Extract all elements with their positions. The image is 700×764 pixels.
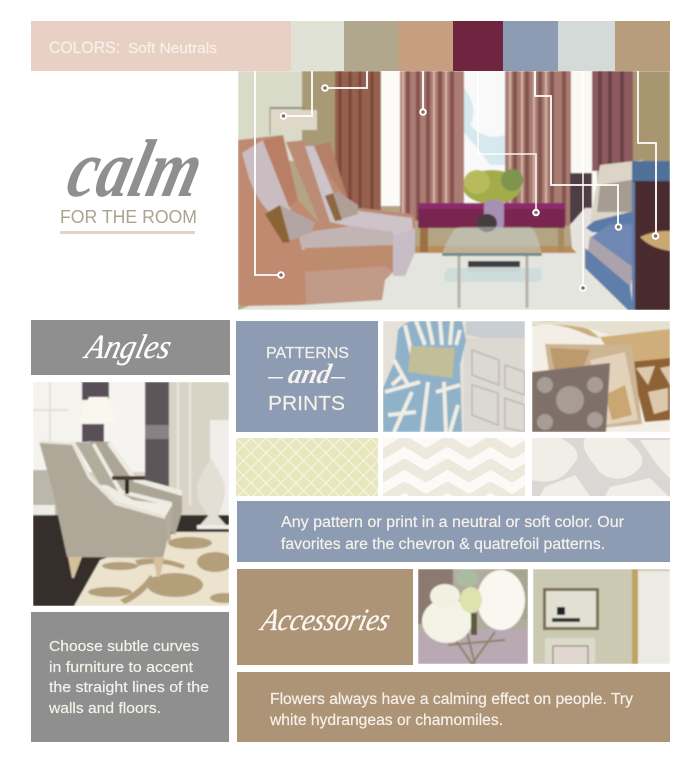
description text: walls and floors. — [48, 700, 161, 717]
floor and rug — [414, 246, 576, 254]
curtains — [335, 71, 381, 213]
front chair seat — [98, 485, 172, 517]
description text: Flowers always have a calming effect on people. Try — [270, 691, 633, 708]
description text: favorites are the chevron & quatrefoil patterns. — [281, 536, 605, 553]
windows — [380, 71, 401, 207]
lamp — [300, 109, 318, 131]
swatch: sage — [291, 21, 344, 71]
sofa — [570, 173, 592, 223]
panel: angles description — [31, 612, 229, 742]
side table — [640, 231, 670, 251]
rear chair — [286, 140, 416, 228]
panel: patterns description — [237, 501, 670, 562]
swatch: pale grey — [558, 21, 615, 71]
callout line: bench — [477, 130, 540, 216]
panel: angles heading — [31, 320, 230, 375]
rug — [74, 532, 229, 606]
photo: patterned throw pillows — [532, 320, 670, 432]
script heading: Angles — [80, 328, 175, 366]
heading: colors soft neutrals: COLORS: — [49, 39, 120, 57]
description text: the straight lines of the — [49, 679, 209, 696]
seat cushion front — [304, 244, 394, 251]
description text: in furniture to accent — [49, 659, 194, 676]
callout line: wall — [322, 71, 367, 91]
second chair — [75, 442, 172, 542]
upper frame — [543, 588, 599, 630]
flowers — [463, 170, 521, 204]
seat top — [298, 226, 393, 250]
swatch: khaki — [344, 21, 398, 71]
third chair back — [314, 142, 348, 198]
living room scene — [238, 71, 670, 310]
panel: accessories heading — [237, 569, 413, 665]
title: calm for the room — [59, 124, 212, 234]
middle pillow — [545, 344, 642, 430]
script heading: Accessories — [257, 602, 394, 637]
script word and with dashes: and — [286, 359, 335, 390]
photo: taupe armchairs on rug — [33, 382, 238, 606]
swatch: quatrefoil pattern — [236, 438, 378, 496]
swatch: chevron pattern — [383, 438, 525, 496]
callout line: lamp — [281, 71, 312, 119]
back pillows — [600, 329, 670, 366]
bench — [420, 228, 428, 252]
photo: framed art on wall — [533, 569, 670, 668]
lower frame — [545, 638, 595, 668]
subtitle underline — [60, 231, 195, 234]
photo: zebra print chair — [383, 321, 525, 432]
third chair — [88, 441, 182, 535]
panel: accessories description — [237, 672, 670, 742]
swatch: burgundy — [453, 21, 503, 71]
script word and with dashes — [268, 359, 345, 390]
callout line: side table — [638, 71, 658, 239]
front chair — [39, 441, 167, 558]
callout line: rug — [580, 71, 586, 291]
heading word prints: PRINTS — [268, 393, 345, 415]
swatch: slate blue — [503, 21, 558, 71]
front chair wing — [263, 135, 298, 207]
swatch: title panel — [31, 21, 291, 71]
urn — [197, 458, 226, 525]
front chair body — [238, 135, 393, 306]
description text: Choose subtle curves — [49, 638, 199, 655]
subtitle: FOR THE ROOM — [60, 207, 197, 227]
swatch: terracotta — [398, 21, 453, 71]
heading word patterns: PATTERNS — [266, 345, 349, 362]
heading: colors soft neutrals: Soft Neutrals — [128, 41, 217, 57]
lamp — [87, 396, 110, 401]
floor — [33, 515, 229, 606]
glass table — [442, 227, 542, 255]
chair — [383, 321, 466, 432]
lower base — [305, 266, 393, 304]
panel: patterns and prints heading — [236, 321, 378, 432]
description text: white hydrangeas or chamomiles. — [269, 712, 503, 729]
swatch: damask pattern — [532, 438, 670, 496]
pillow — [408, 346, 455, 378]
callout line: chair — [255, 71, 284, 278]
photo: white hydrangeas — [418, 569, 528, 664]
side table — [112, 476, 145, 480]
front pillow — [532, 363, 610, 432]
swatch: tan — [615, 21, 670, 71]
throw pillows — [280, 205, 316, 242]
script word calm: calm — [59, 124, 212, 215]
callout line: sofa — [535, 71, 621, 230]
colour palette bar — [31, 21, 670, 71]
front chair inner back — [242, 140, 292, 212]
description text: Any pattern or print in a neutral or soft color. Our — [281, 514, 624, 531]
hero photo: living room with colour callouts — [238, 71, 670, 310]
callout line: curtain — [420, 71, 426, 115]
